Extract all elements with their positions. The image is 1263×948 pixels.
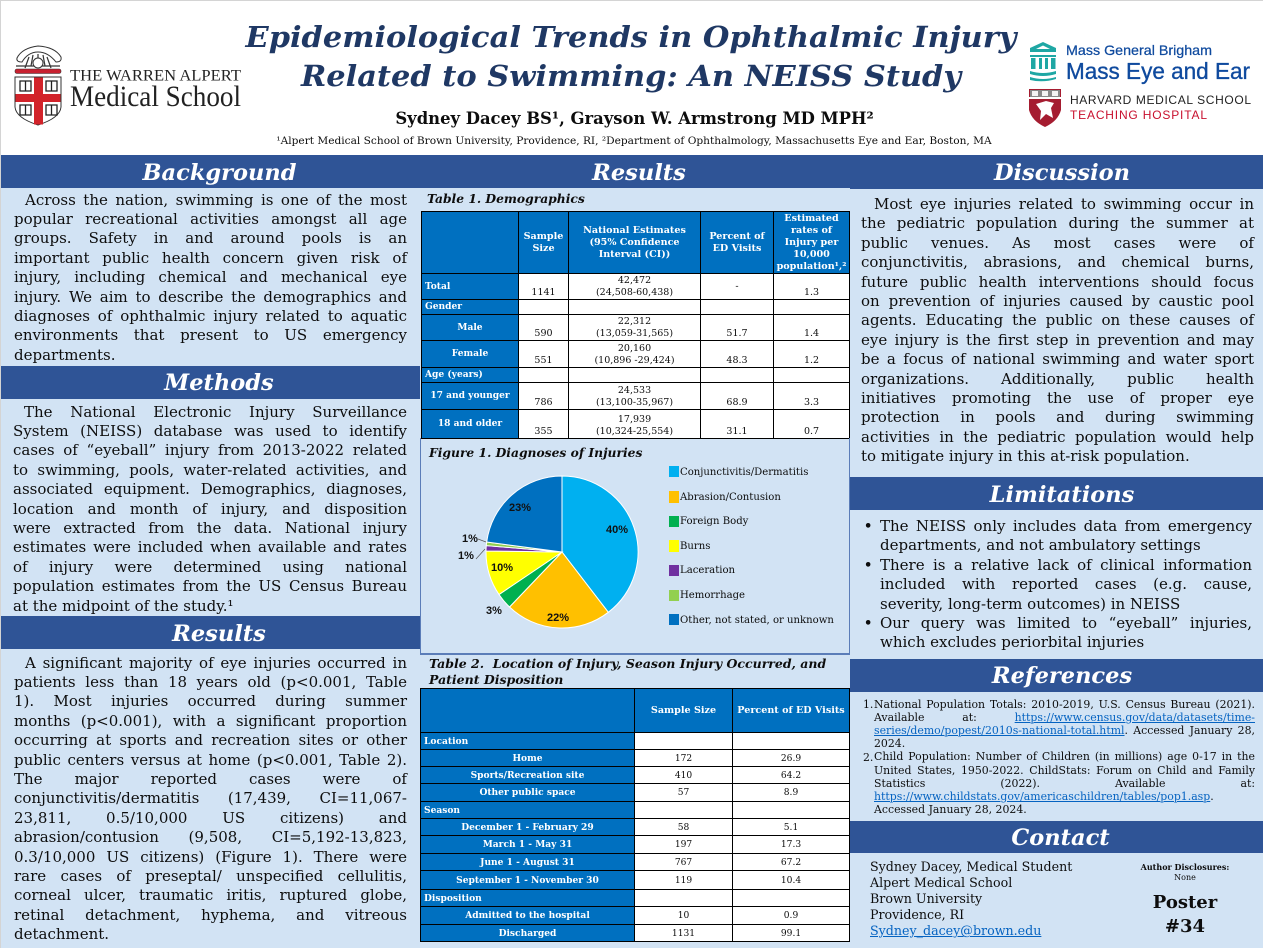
limitations bullet list: Our query was limited to “eyeball” injuries, bbox=[880, 614, 1252, 632]
discussion body text: the pediatric population during the summer at bbox=[861, 214, 1254, 232]
background body text: diagnoses of ophthalmic injury related to aquatic bbox=[14, 307, 407, 325]
background body text: groups. Safety in and around pools is an bbox=[14, 229, 407, 247]
table 2: location, season, disposition: June 1 - August 31 bbox=[480, 856, 575, 868]
table 1: demographics: Male bbox=[457, 322, 483, 332]
methods body text: population estimates from the US Census Bureau bbox=[13, 577, 407, 595]
table 1: demographics: 24,533 bbox=[618, 385, 651, 396]
panel: results left bbox=[1, 649, 420, 948]
reference list: National Population Totals: 2010-2019, U.S. Census Bureau (2021). bbox=[874, 698, 1255, 710]
contact details bbox=[870, 859, 1072, 938]
table 1: demographics: ED Visits bbox=[713, 242, 761, 254]
results body text: conjunctivitis/dermatitis (17,439, CI=11,067- bbox=[14, 789, 407, 807]
table 1: demographics: 18 and older bbox=[438, 418, 502, 429]
title: Related to Swimming: An NEISS Study bbox=[301, 59, 961, 93]
limitations bullet list: which excludes periorbital injuries bbox=[880, 633, 1144, 651]
contact details: Alpert Medical School bbox=[870, 875, 1012, 890]
reference list: https://www.childstats.gov/americaschildren/tables/pop1.asp. bbox=[874, 790, 1214, 803]
poster number: Poster bbox=[1153, 892, 1217, 913]
table 2: location, season, disposition: 410 bbox=[675, 770, 692, 780]
title: Epidemiological Trends in Ophthalmic Injury bbox=[245, 20, 1016, 54]
heading: results centre bbox=[420, 155, 850, 188]
pie chart: diagnoses of injuries: 40% bbox=[606, 524, 628, 536]
contact details: Sydney_dacey@brown.edu bbox=[870, 923, 1041, 938]
methods body text: The National Electronic Injury Surveillance bbox=[24, 402, 407, 420]
heading: limitations: Limitations bbox=[990, 482, 1134, 508]
table 1: demographics: 1.4 bbox=[804, 328, 819, 339]
legend: Abrasion/Contusion bbox=[680, 492, 781, 503]
background body text bbox=[14, 190, 408, 364]
table 1: demographics: 68.9 bbox=[726, 397, 748, 408]
discussion body text: activities in the pediatric population would help bbox=[861, 428, 1254, 446]
table 1: demographics: 1.2 bbox=[804, 355, 819, 366]
results body text: 0.3/10,000 US citizens) (Figure 1). There were bbox=[14, 848, 407, 866]
reference list: Accessed January 28, 2024. bbox=[874, 803, 1027, 816]
results body text: A significant majority of eye injuries occurred in bbox=[25, 654, 407, 672]
table 1: demographics: (10,896 -29,424) bbox=[594, 355, 675, 366]
panel: limitations bbox=[850, 510, 1263, 659]
table 1: demographics: 590 bbox=[534, 328, 553, 339]
logo: Mass Eye and Ear / Harvard: HARVARD MEDICAL SCHOOL bbox=[1070, 93, 1251, 107]
table 1: demographics: Estimated bbox=[784, 212, 839, 224]
results body text: months (p<0.001), with a significant proportion bbox=[14, 712, 407, 730]
table 1: demographics: Age (years) bbox=[425, 369, 483, 380]
reference list: series/demo/popest/2010s-national-total.html. Accessed January 28, bbox=[874, 724, 1255, 737]
heading: methods: Methods bbox=[164, 370, 274, 396]
poster number: #34 bbox=[1165, 916, 1205, 937]
table 1: demographics: Injury per bbox=[785, 236, 838, 248]
table 1: demographics: 17 and younger bbox=[430, 390, 510, 401]
table 2: location, season, disposition: December 1 - February 29 bbox=[461, 822, 594, 832]
table 2: location, season, disposition: Admitted to the hospital bbox=[465, 910, 590, 921]
table 1: demographics: 17,939 bbox=[618, 414, 651, 425]
results body text: 23,811, 0.5/10,000 US citizens) and bbox=[14, 809, 407, 827]
heading: references: References bbox=[992, 663, 1132, 689]
discussion body text: agents. Educating the public on these causes of bbox=[861, 311, 1254, 329]
results body text: patients less than 18 years old (p<0.001, Table bbox=[14, 673, 407, 691]
discussion body text: protection in pools and during swimming bbox=[861, 408, 1254, 426]
table 1: demographics: 22,312 bbox=[618, 316, 651, 327]
table 2: location, season, disposition: Location bbox=[424, 736, 468, 746]
table 2: location, season, disposition: 197 bbox=[675, 840, 692, 850]
table 1: demographics: (13,059-31,565) bbox=[596, 328, 673, 339]
discussion body text bbox=[861, 195, 1255, 465]
logo: Mass Eye and Ear / Harvard: Mass General Brigham bbox=[1066, 42, 1212, 58]
methods body text: location and month of injury, and disposition bbox=[13, 500, 407, 518]
table 2: location, season, disposition: 10.4 bbox=[781, 876, 801, 886]
logo: Warren Alpert Medical School bbox=[14, 46, 242, 126]
text: 1. bbox=[863, 698, 873, 710]
results body text: abrasion/contusion (9,508, CI=5,192-13,823, bbox=[14, 828, 407, 846]
table 2: location, season, disposition: 8.9 bbox=[784, 788, 798, 798]
author disclosures bbox=[1140, 862, 1229, 882]
icon: Mass General Brigham temple bbox=[1030, 42, 1056, 81]
table 2: location, season, disposition: 26.9 bbox=[781, 754, 801, 764]
poster number bbox=[1153, 892, 1218, 937]
methods body text: estimates were included when available and rates bbox=[13, 538, 407, 556]
results body text: public centers versus at home (p<0.001, Table 2). bbox=[14, 751, 407, 769]
author disclosures: None bbox=[1174, 873, 1196, 882]
table 2: location, season, disposition: 67.2 bbox=[781, 858, 801, 868]
table 2: location, season, disposition: Other public space bbox=[479, 787, 576, 798]
table 1: demographics: (13,100-35,967) bbox=[596, 397, 673, 408]
heading: results centre: Results bbox=[592, 160, 686, 186]
table 2: location, season, disposition: 64.2 bbox=[781, 770, 801, 780]
table 1: demographics: 51.7 bbox=[726, 328, 748, 339]
legend: Conjunctivitis/Dermatitis bbox=[680, 467, 808, 478]
results body text: rare cases of preseptal/ unspecified cellulitis, bbox=[14, 867, 407, 885]
results body text: occurring at sports and recreation sites or other bbox=[14, 731, 407, 749]
icon: Harvard shield bbox=[1029, 89, 1061, 127]
table 2: location, season, disposition: 1131 bbox=[672, 928, 695, 938]
table 1: demographics: (24,508-60,438) bbox=[596, 287, 673, 298]
discussion body text: conjunctivitis, abrasions, and chemical burns, bbox=[861, 253, 1254, 271]
limitations bullet list: The NEISS only includes data from emergency bbox=[880, 517, 1252, 535]
table 2: location, season, disposition: 10 bbox=[678, 911, 689, 921]
background body text: Across the nation, swimming is one of the most bbox=[25, 190, 407, 208]
background body text: environments that present to US emergency bbox=[14, 326, 407, 344]
results body text: corneal ulcer, traumatic iritis, ruptured globe, bbox=[14, 886, 407, 904]
pie chart: diagnoses of injuries: 3% bbox=[486, 605, 502, 617]
contact details: Brown University bbox=[870, 891, 982, 906]
table 1: demographics: 1.3 bbox=[804, 287, 819, 298]
methods body text: of injury were determined using national bbox=[13, 558, 407, 576]
legend: Foreign Body bbox=[680, 516, 748, 527]
logo: Warren Alpert Medical School: THE WARREN ALPERT bbox=[70, 68, 242, 84]
table 2: location, season, disposition: March 1 - May 31 bbox=[483, 839, 572, 850]
legend bbox=[669, 466, 834, 626]
table 2: location, season, disposition: 17.3 bbox=[781, 840, 801, 850]
pie chart: diagnoses of injuries: 10% bbox=[491, 562, 513, 574]
text: • bbox=[864, 558, 872, 573]
discussion body text: be a focus of national swimming and water sport bbox=[861, 350, 1254, 368]
pie chart: diagnoses of injuries: 1% bbox=[458, 550, 474, 562]
title bbox=[244, 20, 1018, 93]
table 2 caption bbox=[428, 656, 826, 687]
heading: methods bbox=[1, 366, 420, 399]
table 2: location, season, disposition: 767 bbox=[675, 858, 692, 868]
text: 2. bbox=[863, 750, 873, 764]
table 2: location, season, disposition: 119 bbox=[675, 876, 692, 886]
methods body text: cases of “eyeball” injury from 2013-2022 related bbox=[13, 441, 407, 459]
contact details: Sydney Dacey, Medical Student bbox=[870, 859, 1072, 874]
panel: contact bbox=[850, 853, 1263, 948]
heading: references bbox=[850, 659, 1263, 692]
table 2: location, season, disposition bbox=[420, 688, 850, 942]
heading: contact bbox=[850, 821, 1263, 853]
table 2: location, season, disposition: Sports/Recreation site bbox=[471, 770, 584, 780]
table 1: demographics: Interval (CI)) bbox=[599, 248, 670, 260]
legend: Other, not stated, or unknown bbox=[680, 615, 834, 626]
reference list: 2024. bbox=[874, 737, 905, 750]
limitations bullet list: departments, and not ambulatory settings bbox=[880, 536, 1201, 554]
table 1: demographics: 551 bbox=[534, 355, 553, 366]
discussion body text: Most eye injuries related to swimming occur in bbox=[874, 195, 1254, 213]
table 2: location, season, disposition: 57 bbox=[678, 788, 689, 798]
table 2: location, season, disposition: Season bbox=[424, 804, 460, 816]
authors: Sydney Dacey BS¹, Grayson W. Armstrong MD MPH² bbox=[395, 109, 874, 128]
table 2: location, season, disposition: Home bbox=[512, 752, 543, 764]
table 1: demographics bbox=[421, 211, 850, 439]
heading: discussion: Discussion bbox=[994, 160, 1130, 186]
methods body text: associated equipment. Demographics, diagnoses, bbox=[13, 480, 407, 498]
background body text: popular recreational activities amongst all age bbox=[14, 210, 407, 228]
methods body text: System (NEISS) database was used to identify bbox=[13, 422, 407, 440]
affiliations: ¹Alpert Medical School of Brown University, Providence, RI, ²Department of Ophthalmology, Massachusetts Eye and Ear, Boston, MA bbox=[276, 135, 992, 147]
table 1: demographics: 42,472 bbox=[618, 275, 651, 286]
figure caption: Figure 1. Diagnoses of Injuries bbox=[429, 445, 642, 460]
pie chart: diagnoses of injuries: 23% bbox=[509, 502, 531, 514]
table 2: location, season, disposition: 0.9 bbox=[784, 911, 798, 921]
icon: Brown shield crest bbox=[15, 46, 61, 125]
discussion body text: on prevention of injuries caused by caustic pool bbox=[861, 292, 1254, 310]
limitations bullet list: severity, long-term outcomes) in NEISS bbox=[880, 595, 1180, 613]
table 2: location, season, disposition: Percent of ED Visits bbox=[737, 705, 845, 716]
background body text: departments. bbox=[14, 346, 115, 364]
discussion body text: to mitigate injury in this at-risk population. bbox=[861, 447, 1190, 465]
panel: methods bbox=[1, 399, 420, 617]
table 2 caption: Patient Disposition bbox=[429, 672, 563, 687]
table 1: demographics: (10,324-25,554) bbox=[596, 426, 673, 437]
results body text: detachment. bbox=[14, 925, 109, 943]
table 1: demographics: 355 bbox=[534, 426, 553, 437]
panel: background bbox=[1, 188, 420, 367]
methods body text bbox=[13, 402, 407, 615]
table 1: demographics: 786 bbox=[534, 397, 553, 408]
logo: Mass Eye and Ear / Harvard: TEACHING HOSPITAL bbox=[1070, 108, 1207, 122]
discussion body text: future public health interventions should focus bbox=[861, 273, 1254, 291]
table 1: demographics: 0.7 bbox=[804, 426, 819, 437]
author disclosures: Author Disclosures: bbox=[1141, 862, 1229, 872]
methods body text: at the midpoint of the study.¹ bbox=[13, 597, 234, 615]
background body text: injury. We aim to describe the demographics and bbox=[14, 288, 407, 306]
table 1: demographics: population¹,² bbox=[777, 260, 846, 272]
limitations bullet list: There is a relative lack of clinical information bbox=[880, 556, 1252, 574]
legend: Burns bbox=[680, 541, 710, 552]
table 1: demographics: Female bbox=[452, 348, 488, 359]
results body text bbox=[14, 654, 408, 943]
table 2: location, season, disposition: 5.1 bbox=[784, 822, 798, 832]
panel: discussion bbox=[850, 189, 1263, 477]
table 2: location, season, disposition: September 1 - November 30 bbox=[456, 874, 599, 886]
table 1: demographics: 1141 bbox=[531, 287, 556, 298]
limitations bullet list: included with reported cases (e.g. cause, bbox=[880, 575, 1252, 593]
table 1: demographics: 31.1 bbox=[726, 426, 748, 437]
table 2 caption: Table 2. Location of Injury, Season Injury Occurred, and bbox=[429, 656, 826, 671]
discussion body text: initiatives promoting the use of proper eye bbox=[861, 389, 1254, 407]
table 2: location, season, disposition: Sample Size bbox=[651, 705, 716, 716]
table 1: demographics: (95% Confidence bbox=[589, 236, 680, 248]
limitations bullet list bbox=[864, 517, 1252, 651]
text: • bbox=[864, 519, 872, 534]
discussion body text: eye injury is the first step in prevention and may bbox=[861, 331, 1254, 349]
table 1: demographics: 10,000 bbox=[793, 248, 830, 260]
legend: Laceration bbox=[680, 565, 735, 576]
results body text: retinal detachment, hyphema, and vitreous bbox=[14, 906, 407, 924]
results body text: The major reported cases were of bbox=[14, 770, 407, 788]
panel: references bbox=[850, 692, 1263, 821]
reference list: United States, 1950-2022. ChildStats: Forum on Child and Family bbox=[874, 764, 1255, 777]
legend: Hemorrhage bbox=[680, 590, 745, 601]
heading: contact: Contact bbox=[1011, 825, 1110, 851]
panel: results centre background bbox=[420, 188, 850, 948]
discussion body text: public venues. As most cases were of bbox=[861, 234, 1254, 252]
contact details: Providence, RI bbox=[870, 907, 964, 922]
table 1: demographics: 20,160 bbox=[618, 343, 651, 354]
reference list bbox=[863, 698, 1255, 816]
table 2: location, season, disposition: 58 bbox=[678, 822, 689, 832]
table 1: demographics: Total bbox=[425, 280, 450, 292]
reference list: Available at: https://www.census.gov/data/datasets/time- bbox=[874, 711, 1255, 724]
heading: background: Background bbox=[143, 160, 296, 186]
heading: results left: Results bbox=[172, 621, 266, 647]
methods body text: were extracted from the data. National injury bbox=[13, 519, 407, 537]
reference list: Child Population: Number of Children (in millions) age 0-17 in the bbox=[874, 750, 1255, 763]
pie chart: diagnoses of injuries: 1% bbox=[462, 533, 478, 545]
text: • bbox=[864, 616, 872, 631]
logo: Mass Eye and Ear / Harvard bbox=[1029, 42, 1251, 127]
table 1: demographics: Gender bbox=[425, 301, 462, 312]
heading: background bbox=[1, 155, 420, 188]
table 1: demographics: Size bbox=[532, 242, 555, 254]
heading: limitations bbox=[850, 477, 1263, 510]
logo: Mass Eye and Ear / Harvard: Mass Eye and Ear bbox=[1066, 58, 1250, 84]
table 1: demographics: - bbox=[735, 280, 739, 292]
table 2: location, season, disposition: Disposition bbox=[424, 892, 482, 904]
results body text: 1). Most injuries occurred during summer bbox=[14, 692, 407, 710]
table 1: demographics: Sample bbox=[524, 230, 563, 242]
table 1: demographics: National Estimates bbox=[583, 224, 686, 236]
table 2: location, season, disposition: Discharged bbox=[499, 928, 556, 938]
heading: discussion bbox=[850, 155, 1263, 189]
reference list: Statistics (2022). Available at: bbox=[874, 777, 1255, 790]
background body text: important public health concern given risk of bbox=[14, 249, 407, 267]
table 2: location, season, disposition: 172 bbox=[675, 754, 692, 764]
pie chart: diagnoses of injuries bbox=[458, 476, 639, 628]
table 2: location, season, disposition: 99.1 bbox=[781, 928, 801, 938]
table 1: demographics: Percent of bbox=[709, 230, 765, 242]
heading: results left bbox=[1, 616, 420, 649]
table 1: demographics: 3.3 bbox=[804, 397, 819, 408]
table 1: demographics: 48.3 bbox=[726, 355, 748, 366]
table 1: demographics: rates of bbox=[791, 224, 832, 236]
discussion body text: organizations. Additionally, public health bbox=[861, 370, 1254, 388]
table 1 caption: Table 1. Demographics bbox=[427, 191, 585, 206]
pie chart: diagnoses of injuries: 22% bbox=[547, 612, 569, 624]
background body text: injury, including chemical and mechanical eye bbox=[14, 268, 407, 286]
methods body text: to swimming, pools, water-related activities, and bbox=[13, 461, 407, 479]
